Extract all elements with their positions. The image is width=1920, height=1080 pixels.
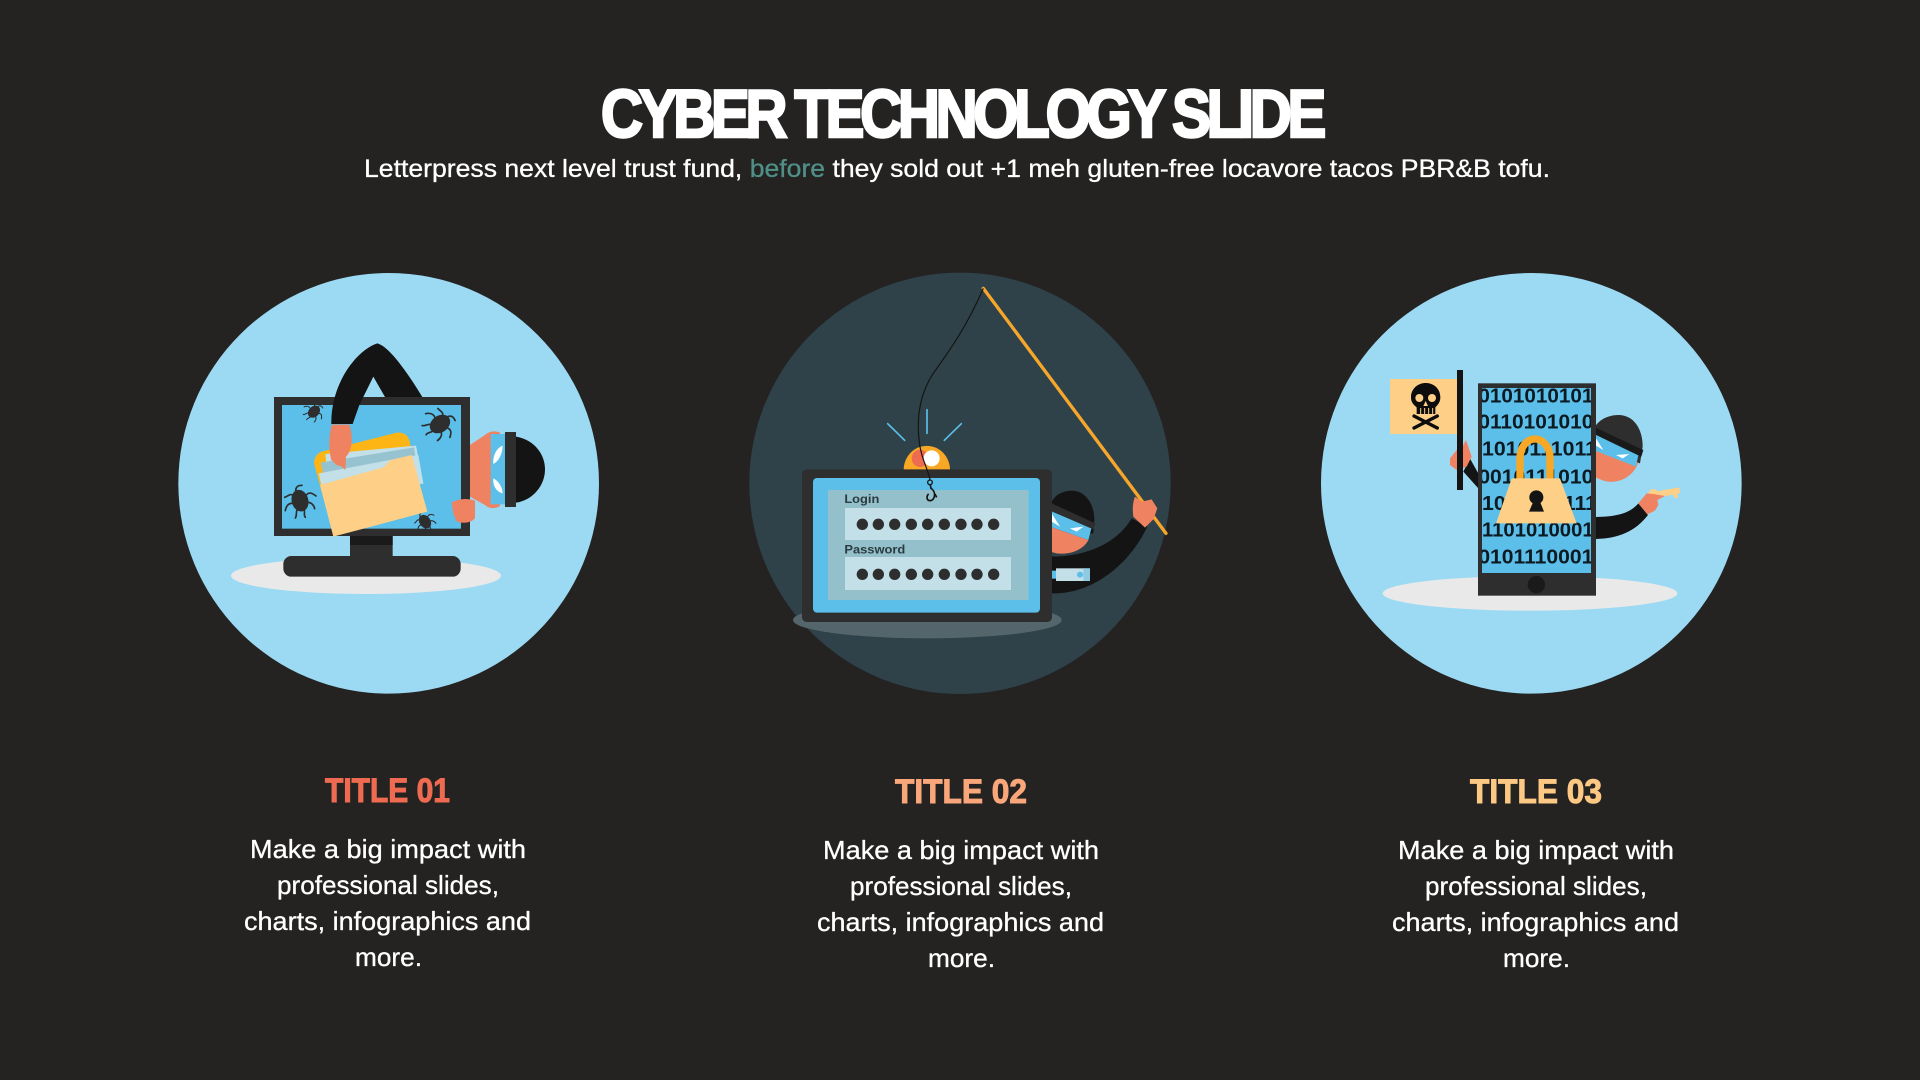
icon: bugs	[285, 399, 460, 536]
column 1 text: charts, infographics and	[244, 906, 531, 936]
icon: arm holding key	[1596, 487, 1680, 539]
icon: hacker arm	[331, 343, 422, 424]
binary code: 0101010101	[1478, 386, 1593, 408]
icon: phone	[1478, 383, 1597, 596]
icon: arm holding flag	[1450, 440, 1478, 488]
binary code: 0101110001	[1478, 546, 1593, 568]
column 1 text: more.	[355, 942, 422, 972]
login label: Login	[844, 492, 879, 506]
password label: Password	[844, 543, 905, 557]
icon: alarm light	[904, 446, 950, 470]
column 2 heading: TITLE 02	[895, 773, 1027, 811]
column 1 text: professional slides,	[277, 870, 499, 900]
subtitle: Letterpress next level trust fund, before they sold out +1 meh gluten-free locavore tacos PBR&B tofu.	[364, 155, 1550, 183]
icon: hacker with arm	[1050, 491, 1147, 593]
icon: fishing line and hook	[918, 288, 983, 501]
column 3 text: more.	[1503, 943, 1570, 973]
icon: USB stick	[1052, 568, 1090, 581]
login field	[845, 508, 1011, 540]
column 2 text: charts, infographics and	[817, 907, 1104, 937]
column 3 text: Make a big impact with	[1398, 835, 1674, 865]
icon: folder	[314, 433, 427, 537]
icon: hand on folder	[329, 425, 352, 470]
binary code: 1010111011	[1482, 438, 1597, 460]
floor shadow 2	[793, 602, 1062, 638]
column 3 text: professional slides,	[1425, 871, 1647, 901]
panel: illustration 1, hacker stealing folder from monitor	[178, 273, 599, 694]
icon: hacker head	[470, 431, 545, 508]
icon: hand on rod	[1133, 497, 1157, 528]
column 2 text: professional slides,	[850, 871, 1072, 901]
icon: hand on monitor	[452, 499, 475, 523]
binary code: 1101010001	[1482, 520, 1594, 542]
column 2 text: Make a big impact with	[823, 835, 1099, 865]
circle background 2	[749, 273, 1171, 694]
icon: padlock	[1496, 439, 1577, 523]
column 2 text: more.	[928, 943, 995, 973]
icon: monitor	[274, 397, 470, 577]
floor shadow 3	[1383, 576, 1677, 611]
icon: fishing rod	[983, 288, 1166, 533]
circle background 1	[178, 273, 599, 694]
binary code: 0010111010	[1478, 466, 1593, 488]
binary code: 0110101010	[1478, 412, 1593, 434]
icon: skull and crossbones	[1411, 383, 1440, 428]
title: CYBER TECHNOLOGY SLIDE	[601, 76, 1324, 152]
floor shadow 1	[231, 557, 501, 594]
column 3 text	[1392, 835, 1679, 973]
icon: hacker head	[1593, 415, 1643, 482]
column 2 text	[817, 835, 1104, 973]
icon: pirate flag	[1390, 370, 1463, 490]
password field	[845, 557, 1011, 590]
circle background 3	[1321, 273, 1742, 694]
column 3 text: charts, infographics and	[1392, 907, 1679, 937]
panel: illustration 3, phone lock and pirate flag	[1321, 273, 1742, 694]
panel: illustration 2, phishing login	[749, 273, 1171, 694]
binary code: 1010101111	[1482, 493, 1597, 515]
icon: alarm rays	[888, 410, 961, 440]
column 1 heading: TITLE 01	[325, 772, 450, 810]
column 1 text: Make a big impact with	[250, 834, 526, 864]
column 1 text	[244, 834, 531, 972]
icon: key	[1648, 487, 1680, 499]
binary code	[1482, 388, 1591, 564]
column 3 heading: TITLE 03	[1470, 773, 1602, 811]
icon: laptop with login form	[802, 469, 1052, 622]
